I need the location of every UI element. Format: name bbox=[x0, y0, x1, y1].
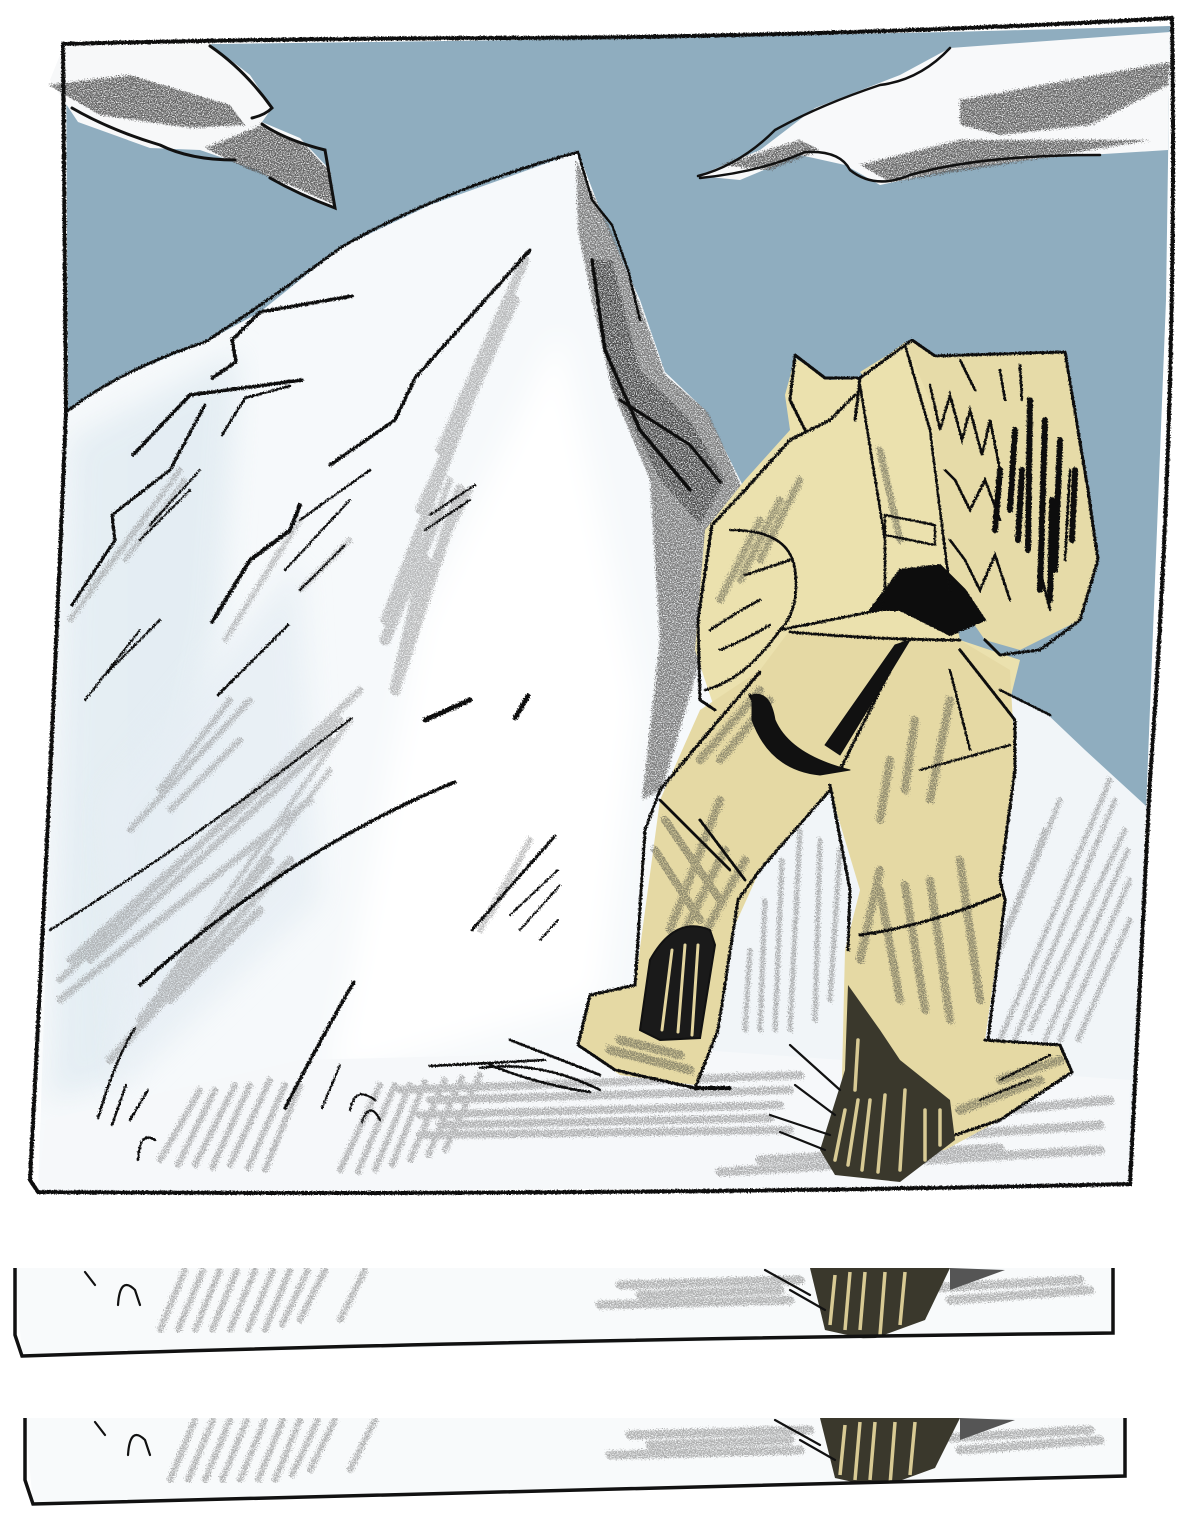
climber: grey shading bbox=[610, 450, 1060, 1110]
mountain: main snow body bbox=[38, 152, 1146, 1192]
climber: figure bbox=[578, 340, 1098, 1182]
ridge shadow: grey right face of the peak bbox=[576, 160, 742, 800]
climber: backpack dark hatching bbox=[870, 360, 1075, 635]
climber: rear boot gaiter bbox=[640, 926, 715, 1040]
strip: second repeated ground slice bbox=[25, 1418, 1125, 1504]
grey hatching: snow ground and slope behind climber bbox=[160, 780, 1130, 1172]
mountain outline and ridge ink lines bbox=[50, 152, 720, 1160]
sky bbox=[66, 26, 1170, 810]
climber: trousers and legs bbox=[578, 630, 1072, 1160]
climber: front boot bbox=[820, 985, 955, 1182]
climber: backpack bbox=[860, 340, 1098, 650]
mountain: right snow slope behind climber bbox=[700, 695, 1146, 1186]
cloud: left bbox=[48, 44, 336, 208]
cloud: right bbox=[698, 32, 1170, 185]
climber: ink outlines bbox=[578, 340, 1098, 1135]
climber: jacket bbox=[695, 342, 1020, 710]
strip: first repeated ground slice bbox=[15, 1268, 1113, 1356]
grey hatching: mountain face bbox=[60, 260, 530, 1060]
climber: pocket and strap black marks bbox=[752, 640, 910, 775]
frame: hand-drawn panel border bbox=[30, 18, 1173, 1193]
mountain: foreground snow bbox=[38, 1050, 1130, 1192]
